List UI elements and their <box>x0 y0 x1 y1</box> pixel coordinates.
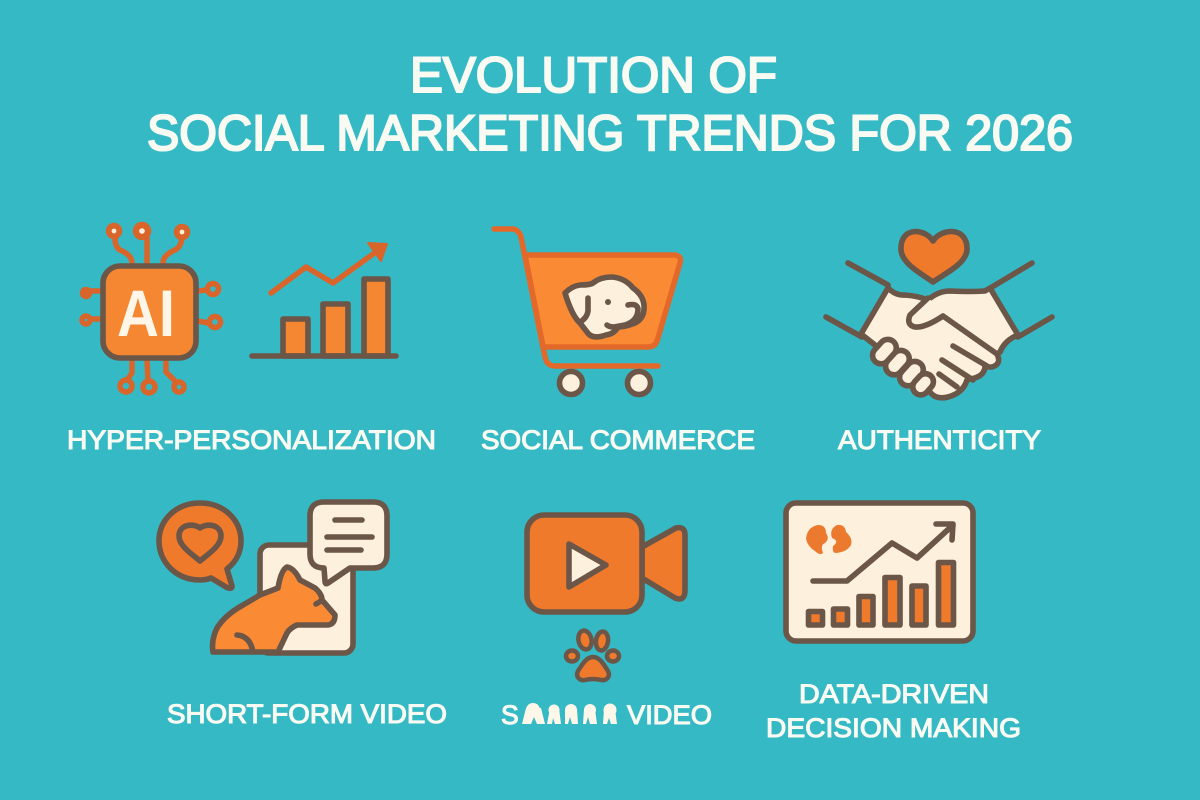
panel: social commerce <box>481 229 755 455</box>
label: social commerce: SOCIAL COMMERCE <box>481 425 755 455</box>
icon: video camera <box>527 515 685 612</box>
icon: handshake <box>826 263 1052 398</box>
label: data-driven decision making <box>766 679 1021 743</box>
title: SOCIAL MARKETING TRENDS FOR 2026 <box>147 105 1073 161</box>
panel: garbled video <box>501 515 712 730</box>
icon: AI chip: AI <box>117 276 175 350</box>
title <box>147 47 1073 161</box>
panel: short-form video <box>159 502 447 729</box>
label: data-driven decision making: DATA-DRIVEN <box>799 679 989 709</box>
icon: photo card with dog <box>212 545 353 653</box>
panel: data-driven decision making <box>766 503 1021 743</box>
icon: heart <box>901 231 967 282</box>
title: EVOLUTION OF <box>410 47 777 103</box>
label: data-driven decision making: DECISION MAKING <box>766 713 1021 743</box>
icon: heart speech bubble <box>159 503 241 588</box>
icon: dashboard chart <box>786 503 973 641</box>
label: garbled video caption <box>501 700 712 730</box>
label: garbled video caption: VIDEO <box>627 700 712 730</box>
label: authenticity: AUTHENTICITY <box>838 425 1041 455</box>
label: hyper-personalization: HYPER-PERSONALIZATION <box>67 425 436 455</box>
chip pin highlights <box>112 228 184 234</box>
label: garbled video caption: S <box>501 700 519 730</box>
bar chart: growth <box>252 243 396 356</box>
panel: authenticity <box>826 231 1052 455</box>
panel: hyper-personalization <box>67 224 436 455</box>
icon: AI chip <box>82 224 220 393</box>
icon: shopping cart with dog <box>494 229 680 394</box>
icon: text speech bubble <box>310 502 387 584</box>
label: short-form video: SHORT-FORM VIDEO <box>167 699 447 729</box>
icon: paw <box>566 629 619 680</box>
